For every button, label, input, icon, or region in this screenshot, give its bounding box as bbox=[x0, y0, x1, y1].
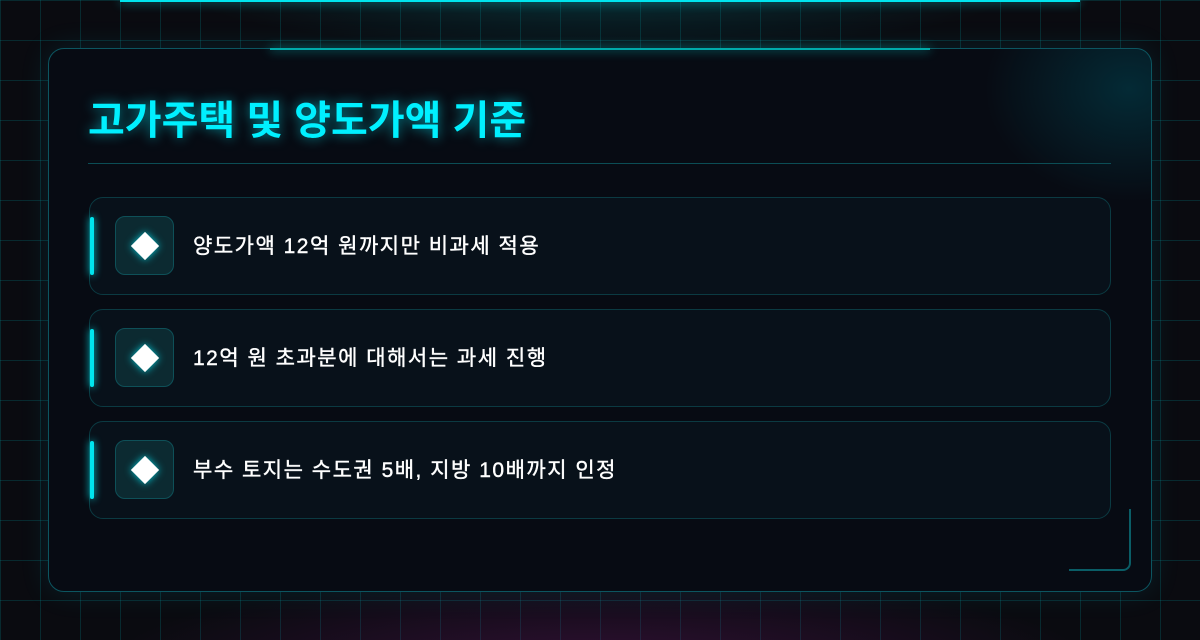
item 2 bbox=[89, 309, 1111, 407]
icon: diamond bbox=[115, 216, 174, 275]
corner bracket decoration bbox=[1069, 509, 1131, 571]
text: item 2: 12억 원 초과분에 대해서는 과세 진행 bbox=[193, 347, 548, 370]
icon: diamond bbox=[115, 328, 174, 387]
text: item 1: 양도가액 12억 원까지만 비과세 적용 bbox=[193, 235, 540, 258]
title: 고가주택 및 양도가액 기준 bbox=[88, 99, 526, 143]
panel: main card bbox=[48, 48, 1152, 592]
text: item 3: 부수 토지는 수도권 5배, 지방 10배까지 인정 bbox=[193, 459, 617, 482]
item 3 bbox=[89, 421, 1111, 519]
icon: diamond bbox=[115, 440, 174, 499]
item 1 bbox=[89, 197, 1111, 295]
